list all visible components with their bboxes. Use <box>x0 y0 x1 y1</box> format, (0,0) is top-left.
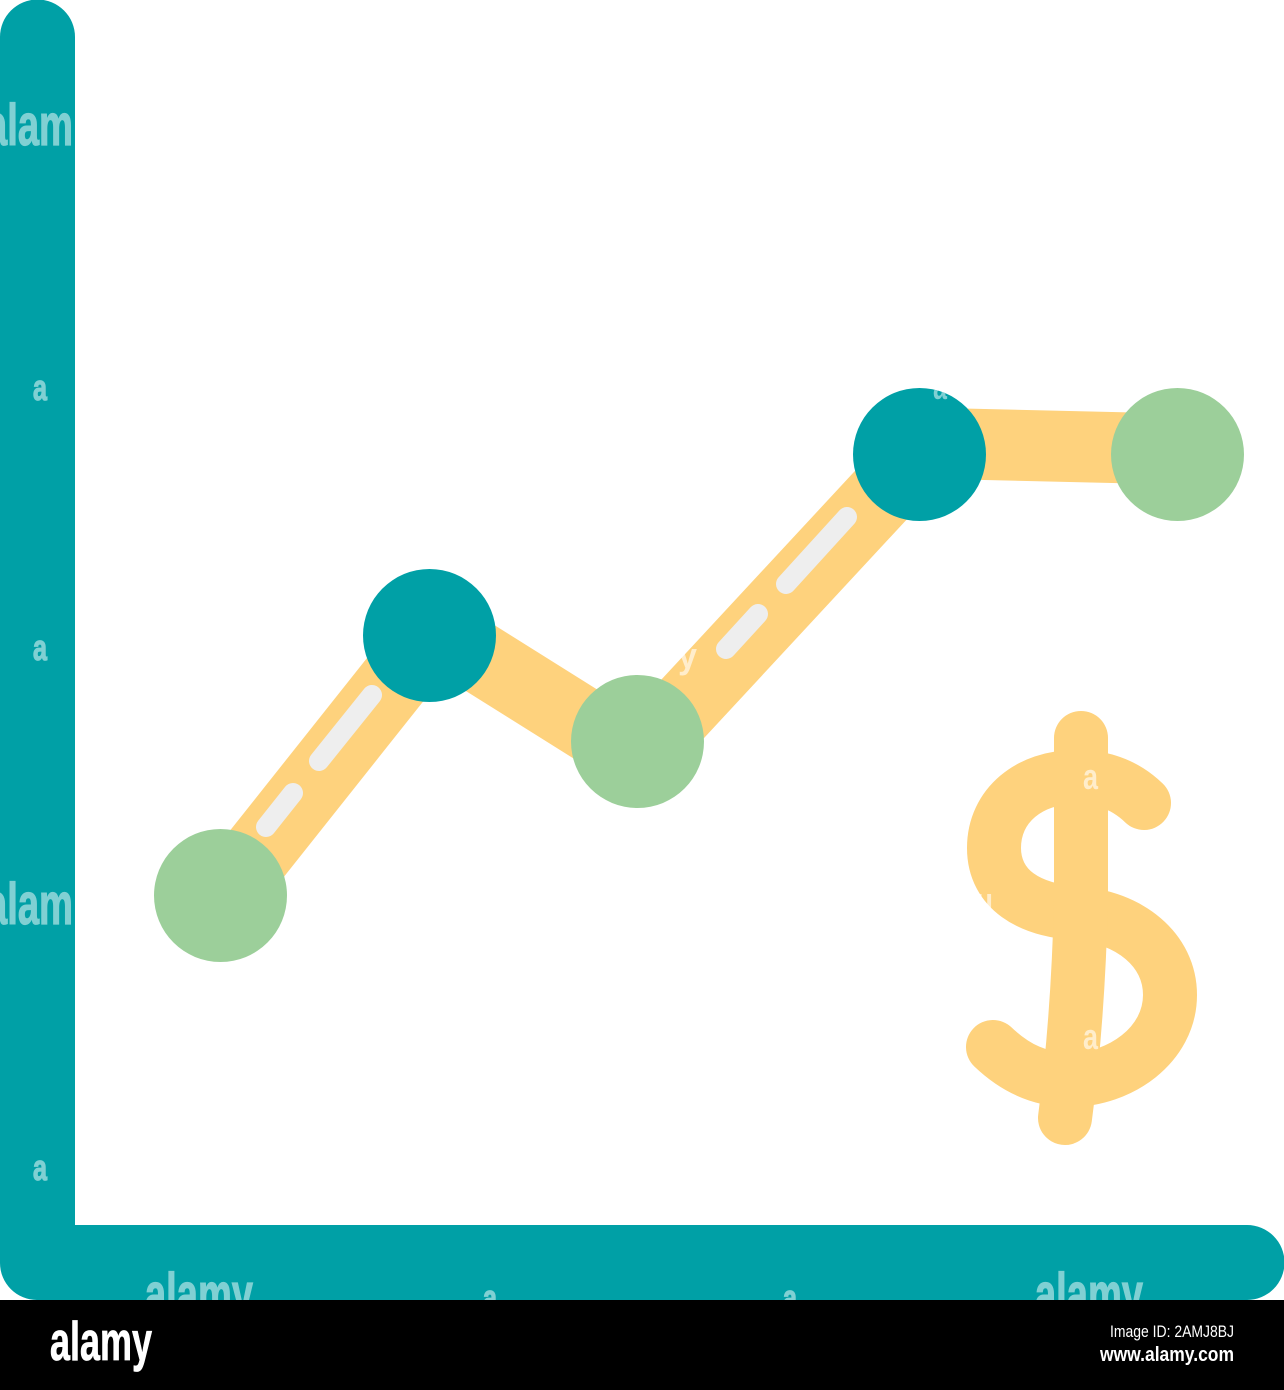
watermark on data point: a <box>933 366 948 407</box>
watermarks on dollar sign: a <box>1083 1016 1099 1057</box>
data points <box>154 388 1244 962</box>
watermarks on axes <box>0 93 1143 1327</box>
watermarks on axes: a <box>483 1277 498 1318</box>
icon: dollar sign <box>993 738 1170 1118</box>
watermarks on dollar sign <box>976 756 1099 1057</box>
line chart connector <box>221 443 1178 899</box>
website: www.alamy.com <box>1099 1344 1234 1366</box>
watermark on connector: y <box>678 635 697 676</box>
footer bar <box>0 1300 1284 1390</box>
dashed highlights on the line <box>266 517 847 827</box>
watermarks on axes: a <box>783 1277 798 1318</box>
watermarks on axes: alamy <box>145 1262 253 1327</box>
watermarks on axes: a <box>33 367 48 408</box>
watermarks on axes: a <box>33 627 48 668</box>
watermarks on dollar sign: u <box>976 880 993 921</box>
watermarks on axes: alamy <box>1035 1262 1143 1327</box>
image id: Image ID: 2AMJ8BJ <box>1110 1322 1234 1341</box>
watermarks on dollar sign: a <box>1083 756 1099 797</box>
footer logo: alamy <box>50 1310 152 1372</box>
watermarks on axes: a <box>33 1147 48 1188</box>
